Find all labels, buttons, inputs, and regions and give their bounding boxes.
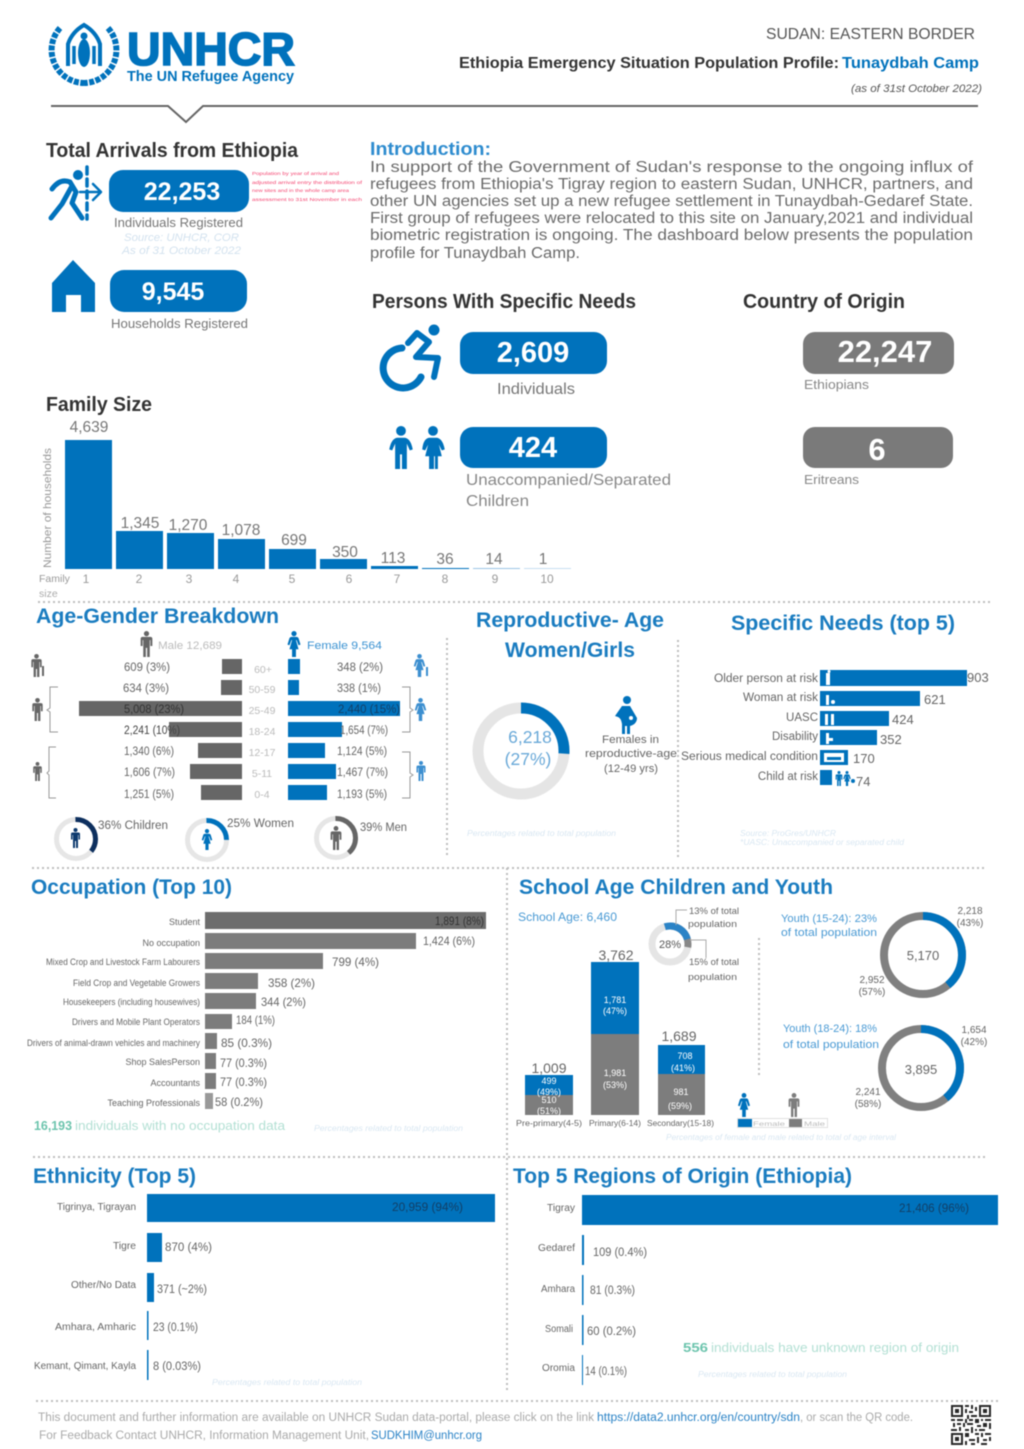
labels: occupation: Drivers and Mobile Plant Operators xyxy=(72,1017,200,1027)
introduction text: refugees from Ethiopia's Tigray region to eastern Sudan, UNHCR, partners, and xyxy=(370,176,973,193)
family size values: 1,345 xyxy=(121,515,159,532)
axis caption xyxy=(39,573,71,600)
male age bars xyxy=(79,659,242,800)
labels: ethnicity: Kemant, Qimant, Kayla xyxy=(34,1361,136,1372)
bar totals xyxy=(531,947,697,1076)
family size categories: 2 xyxy=(136,572,143,586)
labels: specific needs: Woman at risk xyxy=(743,692,818,704)
donut: women xyxy=(188,818,294,860)
heading: age-gender breakdown: Age-Gender Breakdown xyxy=(36,605,279,628)
female total: Female 9,564 xyxy=(307,640,382,652)
stat pill: Ethiopians xyxy=(803,332,954,374)
panel: reproductive-age women and girls xyxy=(467,609,677,838)
male age values: 1,340 (6%) xyxy=(124,746,174,758)
stacked bar chart: school levels: (53%) xyxy=(603,1080,627,1090)
values: occupation: 77 (0.3%) xyxy=(220,1075,267,1089)
donut: school age share xyxy=(648,922,692,966)
age band labels: 12-17 xyxy=(249,747,276,759)
label: households registered: Households Registered xyxy=(111,317,248,331)
heading: reproductive-age xyxy=(476,609,664,662)
stacked bar chart: school levels: (49%) xyxy=(537,1087,561,1097)
note: percentages: Percentages related to total population xyxy=(698,1370,848,1379)
labels: regions: Amhara xyxy=(541,1284,575,1295)
icons in bars xyxy=(824,670,844,762)
family size categories: 8 xyxy=(442,572,449,586)
values: ethnicity: 371 (~2%) xyxy=(157,1284,207,1296)
heading: introduction: Introduction: xyxy=(370,138,491,159)
female age values: 1,654 (7%) xyxy=(340,725,388,737)
donut: youth 15-24: (57%) xyxy=(859,987,885,998)
header date: (as of 31st October 2022) xyxy=(851,83,982,95)
stacked bar chart: school levels: (41%) xyxy=(671,1063,695,1073)
icon: pregnant woman xyxy=(615,696,637,734)
age band labels: 0-4 xyxy=(254,789,270,801)
footer text xyxy=(38,1412,913,1442)
male age values: 5,008 (23%) xyxy=(124,704,184,716)
donut: reproductive age: (27%) xyxy=(505,749,551,769)
label: unaccompanied children: Children xyxy=(466,493,529,510)
values: occupation: 58 (0.2%) xyxy=(215,1095,263,1109)
donut: youth 15-24: (43%) xyxy=(957,918,983,929)
label: individuals registered: Individuals Registered xyxy=(114,216,243,230)
values: occupation: 77 (0.3%) xyxy=(220,1056,267,1070)
note: percentages: Percentages related to total population xyxy=(467,829,617,838)
values: specific needs: 621 xyxy=(924,692,946,707)
family size categories: 5 xyxy=(289,572,296,586)
labels: occupation: Mixed Crop and Livestock Farm Labourers xyxy=(46,957,200,967)
family size values: 4,639 xyxy=(70,419,108,436)
label: youth 18-24: of total population xyxy=(783,1039,879,1051)
values: regions: 81 (0.3%) xyxy=(590,1285,635,1297)
stacked bar chart: school levels xyxy=(525,962,705,1116)
values: occupation: 1,424 (6%) xyxy=(423,934,475,948)
note: percentages: Percentages related to total population xyxy=(314,1124,464,1133)
donut: youth 18-24: (42%) xyxy=(961,1037,987,1048)
stat pill: 2,609 xyxy=(460,332,607,374)
label: unaccompanied children: Unaccompanied/Separated xyxy=(466,472,671,489)
donut: youth 18-24: (58%) xyxy=(855,1099,881,1110)
family size values: 14 xyxy=(485,551,503,568)
source note: Source: UNHCR, COR xyxy=(124,232,239,244)
logo: UNHCR xyxy=(52,23,295,85)
family size categories: 9 xyxy=(492,572,499,586)
stat pill: 2,609: 2,609 xyxy=(497,337,569,369)
stat pill: Eritreans: 6 xyxy=(868,432,886,467)
header title: Ethiopia Emergency Situation Population Profile: xyxy=(459,55,839,72)
family size values: 1,078 xyxy=(222,522,260,539)
labels: ethnicity: Amhara, Amharic xyxy=(55,1322,136,1333)
note: source xyxy=(740,829,905,847)
family size categories: 3 xyxy=(186,572,193,586)
family size values: 113 xyxy=(381,550,405,567)
heading: regions: Top 5 Regions of Origin (Ethiopia) xyxy=(513,1165,852,1188)
icon: QR code xyxy=(951,1405,991,1445)
labels: ethnicity xyxy=(34,1202,136,1372)
donut: school age share: 28% xyxy=(659,939,681,951)
donut: reproductive age: 6,218 xyxy=(508,727,552,747)
labels: occupation: Shop SalesPerson xyxy=(125,1057,200,1067)
labels: ethnicity: Tigrinya, Tigrayan xyxy=(57,1202,136,1213)
female age values xyxy=(337,662,400,801)
labels: occupation: Teaching Professionals xyxy=(107,1098,200,1108)
values: regions: 21,406 (96%) xyxy=(899,1203,969,1215)
introduction text: In support of the Government of Sudan's response to the ongoing influx of xyxy=(370,159,974,176)
note: source: Source: ProGres/UNHCR xyxy=(740,829,836,838)
bar chart: family size xyxy=(65,440,571,569)
footer link: https://data2.unhcr.org/en/country/sdn xyxy=(597,1412,800,1424)
icon: house xyxy=(52,260,95,312)
bar categories: Primary(6-14) xyxy=(589,1119,641,1128)
stat pill: individuals xyxy=(109,170,249,212)
label: females in reproductive age: reproductive-age xyxy=(585,748,677,760)
donut: reproductive age xyxy=(478,708,564,794)
family size values: 699 xyxy=(281,532,307,549)
donut: men: 39% Men xyxy=(360,822,407,834)
source note xyxy=(121,232,241,257)
female age values: 348 (2%) xyxy=(337,662,383,674)
bar categories: Secondary(15-18) xyxy=(647,1119,714,1128)
header rule with notch xyxy=(51,106,978,122)
panel: age-gender breakdown xyxy=(31,605,428,860)
heading: ethnicity: Ethnicity (Top 5) xyxy=(33,1165,196,1188)
male age values xyxy=(123,662,184,801)
labels: regions: Gedaref xyxy=(538,1243,575,1254)
icon: UNHCR laurel and sheltering hands xyxy=(52,25,116,83)
bars: regions xyxy=(582,1195,998,1385)
icons: female age groups xyxy=(414,654,428,781)
labels: ethnicity: Other/No Data xyxy=(71,1280,136,1291)
female age values: 2,440 (15%) xyxy=(338,704,400,716)
panel: country of origin xyxy=(743,291,954,487)
family size categories: 1 xyxy=(83,572,90,586)
male age values: 2,241 (10%) xyxy=(124,725,180,737)
values: occupation: 85 (0.3%) xyxy=(221,1036,272,1050)
donut: women: 25% Women xyxy=(227,818,294,830)
panel: regions of origin xyxy=(513,1165,998,1385)
panel: family size xyxy=(39,394,571,600)
label: youth 15-24: Youth (15-24): 23% xyxy=(781,913,877,925)
donut: youth 18-24: 3,895 xyxy=(905,1062,937,1077)
family size values: 350 xyxy=(332,544,358,561)
footer line two: For Feedback Contact UNHCR, Information Management Unit, xyxy=(39,1430,369,1442)
labels: occupation: Drivers of animal-drawn vehicles and machinery xyxy=(27,1038,200,1048)
introduction text: First group of refugees were relocated to this site on January,2021 and individual xyxy=(370,210,973,227)
family size values xyxy=(70,419,547,568)
donut callouts xyxy=(676,906,739,983)
values: occupation: 344 (2%) xyxy=(261,995,306,1009)
age band labels: 50-59 xyxy=(249,684,276,696)
icons: male age groups xyxy=(31,654,44,781)
hidden-style red note: adjusted arrival entry the distribution of xyxy=(252,180,363,185)
logo tagline: The UN Refugee Agency xyxy=(127,68,295,85)
footer QR mention: , or scan the QR code. xyxy=(800,1412,913,1424)
labels: occupation: Student xyxy=(169,917,200,927)
label: Eritreans: Eritreans xyxy=(804,472,860,487)
icon: two children xyxy=(389,426,445,469)
family size categories: 4 xyxy=(233,572,240,586)
age band labels: 25-49 xyxy=(249,705,276,717)
labels: specific needs: Child at risk xyxy=(758,771,818,783)
female age values: 1,124 (5%) xyxy=(337,746,387,758)
stacked bar chart: school levels: 499 xyxy=(541,1076,557,1086)
donut callouts: 15% of total xyxy=(689,957,739,968)
introduction text: biometric registration is ongoing. The dashboard below presents the population xyxy=(370,227,973,244)
callout: no occupation data: individuals with no occupation data xyxy=(75,1119,285,1133)
family size categories: 7 xyxy=(394,572,401,586)
labels: occupation: Housekeepers (including housewives) xyxy=(63,997,200,1007)
callout: unknown region: individuals have unknown region of origin xyxy=(711,1341,959,1355)
stacked bar chart: school levels: (59%) xyxy=(668,1101,692,1111)
family size categories: 10 xyxy=(540,572,554,586)
label: school age total: School Age: 6,460 xyxy=(518,910,617,924)
labels: occupation: Accountants xyxy=(150,1078,200,1088)
hidden-style red note xyxy=(252,171,363,202)
age band labels: 18-24 xyxy=(249,726,276,738)
stacked bar chart: school levels: 981 xyxy=(673,1087,689,1097)
stat pill: 424: 424 xyxy=(509,432,557,464)
hidden-style red note: assessment to 31st November in each xyxy=(252,197,363,202)
values: occupation: 1,891 (8%) xyxy=(435,914,484,928)
heading: total arrivals: Total Arrivals from Ethiopia xyxy=(46,140,299,162)
note: percentages: Percentages related to total population xyxy=(212,1378,363,1387)
note: source: *UASC: Unaccompanied or separated child xyxy=(740,838,905,847)
donut: youth 15-24 xyxy=(859,906,983,998)
donut callouts: population xyxy=(688,972,737,983)
values: regions: 60 (0.2%) xyxy=(587,1326,636,1338)
icon: person crossing border xyxy=(51,167,101,219)
hidden-style red note: new sites and in the whole camp area xyxy=(252,188,350,193)
stat pill: households: 9,545 xyxy=(142,278,204,306)
heading: school age: School Age Children and Youth xyxy=(519,876,833,899)
female total xyxy=(288,631,382,657)
heading: occupation: Occupation (Top 10) xyxy=(31,876,232,899)
bar totals: 1,009 xyxy=(531,1060,567,1076)
age band labels xyxy=(249,664,276,801)
label: youth 15-24 xyxy=(781,913,877,939)
icon: wheelchair user xyxy=(383,324,440,388)
values: ethnicity: 8 (0.03%) xyxy=(153,1361,201,1373)
stat pill: individuals: 22,253 xyxy=(144,178,220,206)
female age values: 1,193 (5%) xyxy=(337,789,387,801)
label: females in reproductive age xyxy=(585,734,677,775)
legend: female and male: Male xyxy=(804,1121,826,1128)
values: ethnicity xyxy=(153,1202,463,1373)
note: interval percentages: Percentages of female and male related to total of age interval xyxy=(666,1133,896,1142)
header camp name: Tunaydbah Camp xyxy=(842,55,979,72)
callout: no occupation data: 16,193 xyxy=(34,1119,72,1133)
bar totals: 1,689 xyxy=(661,1028,697,1044)
label: Ethiopians: Ethiopians xyxy=(804,377,870,392)
stacked bar chart: school levels: 708 xyxy=(677,1051,693,1061)
bar totals: 3,762 xyxy=(598,947,634,963)
values: specific needs: 352 xyxy=(880,732,902,747)
values: regions: 109 (0.4%) xyxy=(593,1247,647,1259)
age band labels: 60+ xyxy=(254,664,272,676)
icon: child at risk xyxy=(836,771,855,786)
donut: children: 36% Children xyxy=(98,820,168,832)
stacked bar chart: school levels: 1,981 xyxy=(604,1068,626,1078)
label: unaccompanied children xyxy=(466,472,671,510)
source note: As of 31 October 2022 xyxy=(121,245,241,257)
values: regions xyxy=(585,1203,969,1378)
family size categories: 6 xyxy=(346,572,353,586)
brackets xyxy=(47,687,413,798)
bars: specific needs xyxy=(820,670,967,785)
heading: family size: Family Size xyxy=(46,394,152,416)
female age bars xyxy=(288,659,400,800)
male age values: 1,251 (5%) xyxy=(124,789,174,801)
stacked bar chart: school levels: (47%) xyxy=(603,1006,627,1016)
values: specific needs: 170 xyxy=(853,751,875,766)
stat pill: 424 xyxy=(460,427,607,468)
values: ethnicity: 20,959 (94%) xyxy=(392,1202,463,1214)
logo wordmark: UNHCR xyxy=(127,23,295,75)
labels: occupation xyxy=(27,917,200,1108)
icon: bed xyxy=(827,757,841,760)
values: ethnicity: 23 (0.1%) xyxy=(153,1322,198,1334)
stat pill: Ethiopians: 22,247 xyxy=(838,334,932,369)
male age values: 1,606 (7%) xyxy=(124,767,175,779)
stat pill: households xyxy=(110,270,247,312)
label: youth 18-24 xyxy=(783,1023,879,1051)
label: youth 18-24: Youth (18-24): 18% xyxy=(783,1023,877,1035)
donut: youth 15-24: 2,218 xyxy=(957,906,983,917)
footer email: SUDKHIM@unhcr.org xyxy=(371,1430,482,1442)
labels: regions: Oromia xyxy=(542,1363,575,1374)
panel: ethnicity xyxy=(33,1165,495,1387)
age band labels: 5-11 xyxy=(252,768,272,780)
donut callouts: population xyxy=(688,919,737,930)
labels: specific needs: Serious medical condition xyxy=(681,751,818,763)
footer line one: This document and further information are available on UNHCR Sudan data-portal, please click on the link xyxy=(38,1412,594,1424)
panel: introduction xyxy=(370,138,974,262)
label: females in reproductive age: (12-49 yrs) xyxy=(604,763,658,775)
heading: reproductive-age: Reproductive- Age xyxy=(476,609,664,632)
values: occupation: 184 (1%) xyxy=(236,1013,275,1027)
family size values: 1,270 xyxy=(169,517,208,534)
header titles xyxy=(459,26,982,95)
male age values: 609 (3%) xyxy=(124,662,170,674)
labels: occupation: Field Crop and Vegetable Growers xyxy=(73,978,200,988)
values: occupation: 358 (2%) xyxy=(268,976,315,990)
hidden-style red note: Population by year of arrival and xyxy=(252,171,340,176)
family size values: 1 xyxy=(539,551,547,568)
bars: occupation xyxy=(205,912,486,1109)
panel: school age children and youth xyxy=(516,876,987,1142)
stacked bar chart: school levels: (51%) xyxy=(537,1106,561,1116)
values: specific needs: 424 xyxy=(892,712,914,727)
axis caption: size xyxy=(39,588,58,600)
values: specific needs: 74 xyxy=(856,774,870,789)
values: specific needs: 903 xyxy=(967,670,989,685)
introduction text: other UN agencies set up a new refugee settlement in Tunaydbah-Gedaref State. xyxy=(370,193,973,210)
donut: youth 15-24: 5,170 xyxy=(907,948,939,963)
donut callouts: 13% of total xyxy=(689,906,739,917)
labels: specific needs: Older person at risk xyxy=(714,673,818,685)
donut: men xyxy=(316,818,407,858)
family size values: 36 xyxy=(436,551,454,568)
male total: Male 12,689 xyxy=(158,640,222,652)
male total xyxy=(141,631,222,657)
labels: specific needs xyxy=(681,673,818,783)
bar categories xyxy=(516,1119,714,1128)
donut: youth 18-24 xyxy=(855,1025,987,1110)
label: females in reproductive age: Females in xyxy=(602,734,659,746)
female age values: 1,467 (7%) xyxy=(337,767,388,779)
bar categories: Pre-primary(4-5) xyxy=(516,1119,582,1128)
heading: specific needs: Specific Needs (top 5) xyxy=(731,612,955,635)
panel: total arrivals xyxy=(46,140,363,331)
panel: occupation xyxy=(27,876,486,1133)
labels: ethnicity: Tigre xyxy=(113,1241,136,1252)
stacked bar chart: school levels: 1,781 xyxy=(604,995,626,1005)
legend: female and male: Female xyxy=(753,1121,786,1128)
callout: unknown region: 556 xyxy=(683,1341,708,1355)
female age values: 338 (1%) xyxy=(337,683,381,695)
label: youth 15-24: of total population xyxy=(781,927,877,939)
panel: persons with specific needs xyxy=(372,291,671,510)
panel: specific needs top 5 xyxy=(681,612,989,847)
male age values: 634 (3%) xyxy=(123,683,169,695)
values: occupation xyxy=(215,914,484,1109)
labels: regions: Somali xyxy=(545,1324,573,1335)
heading: reproductive-age: Women/Girls xyxy=(505,639,635,662)
stat pill: Eritreans xyxy=(803,427,953,468)
labels: regions: Tigray xyxy=(547,1203,575,1214)
values: specific needs xyxy=(853,670,989,789)
donut: youth 18-24: 1,654 xyxy=(961,1025,987,1036)
heading: persons with specific needs: Persons With Specific Needs xyxy=(372,291,636,313)
y axis label: Number of households xyxy=(42,447,54,568)
labels: regions xyxy=(538,1203,575,1374)
label: individuals: Individuals xyxy=(497,381,575,398)
values: ethnicity: 870 (4%) xyxy=(165,1242,212,1254)
donut: youth 15-24: 2,952 xyxy=(859,975,885,986)
labels: occupation: No occupation xyxy=(142,938,200,948)
legend: female and male xyxy=(738,1093,828,1128)
header location: SUDAN: EASTERN BORDER xyxy=(766,26,975,43)
family size categories xyxy=(83,572,554,586)
stacked bar chart: school levels: 510 xyxy=(541,1095,557,1105)
donut: children xyxy=(56,820,168,858)
introduction text: profile for Tunaydbah Camp. xyxy=(370,245,580,262)
donut: youth 18-24: 2,241 xyxy=(855,1087,881,1098)
labels: specific needs: UASC xyxy=(786,712,818,724)
heading: country of origin: Country of Origin xyxy=(743,291,905,313)
bars: ethnicity xyxy=(147,1194,495,1380)
introduction text xyxy=(370,159,974,262)
values: regions: 14 (0.1%) xyxy=(585,1366,627,1378)
axis caption: Family xyxy=(39,573,71,585)
labels: specific needs: Disability xyxy=(772,731,818,743)
values: occupation: 799 (4%) xyxy=(332,955,379,969)
